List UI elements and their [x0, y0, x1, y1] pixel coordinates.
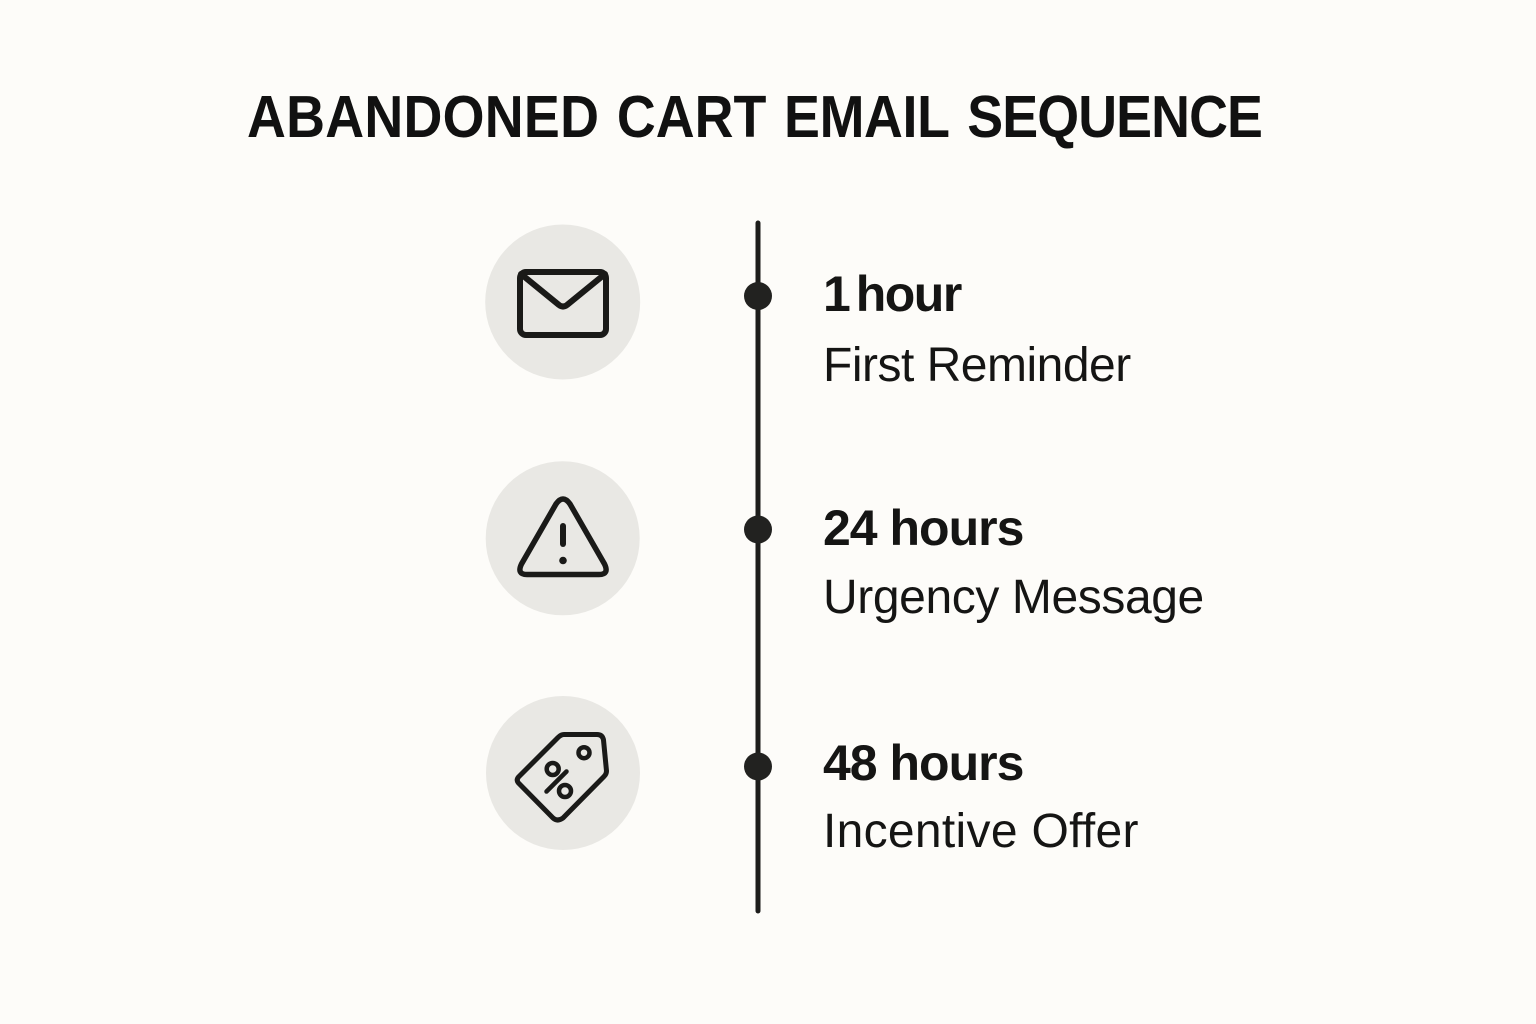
step 3 description: Incentive Offer	[823, 805, 1139, 858]
icon: envelope	[485, 224, 640, 380]
step 1 label: 1 hour	[823, 266, 961, 322]
step 3 label: 48 hours	[823, 735, 1023, 791]
timeline dot: 48 hours	[744, 752, 772, 780]
step 1 description: First Reminder	[823, 339, 1131, 392]
icon: discount tag	[486, 696, 640, 850]
step 2 label: 24 hours	[823, 500, 1023, 556]
timeline vertical line	[756, 223, 760, 911]
title: ABANDONED CART EMAIL SEQUENCE	[247, 84, 1262, 150]
step 2 description: Urgency Message	[823, 571, 1204, 624]
timeline dot: 1 hour	[744, 282, 772, 310]
timeline dot: 24 hours	[744, 516, 772, 544]
icon: warning triangle	[486, 461, 640, 615]
